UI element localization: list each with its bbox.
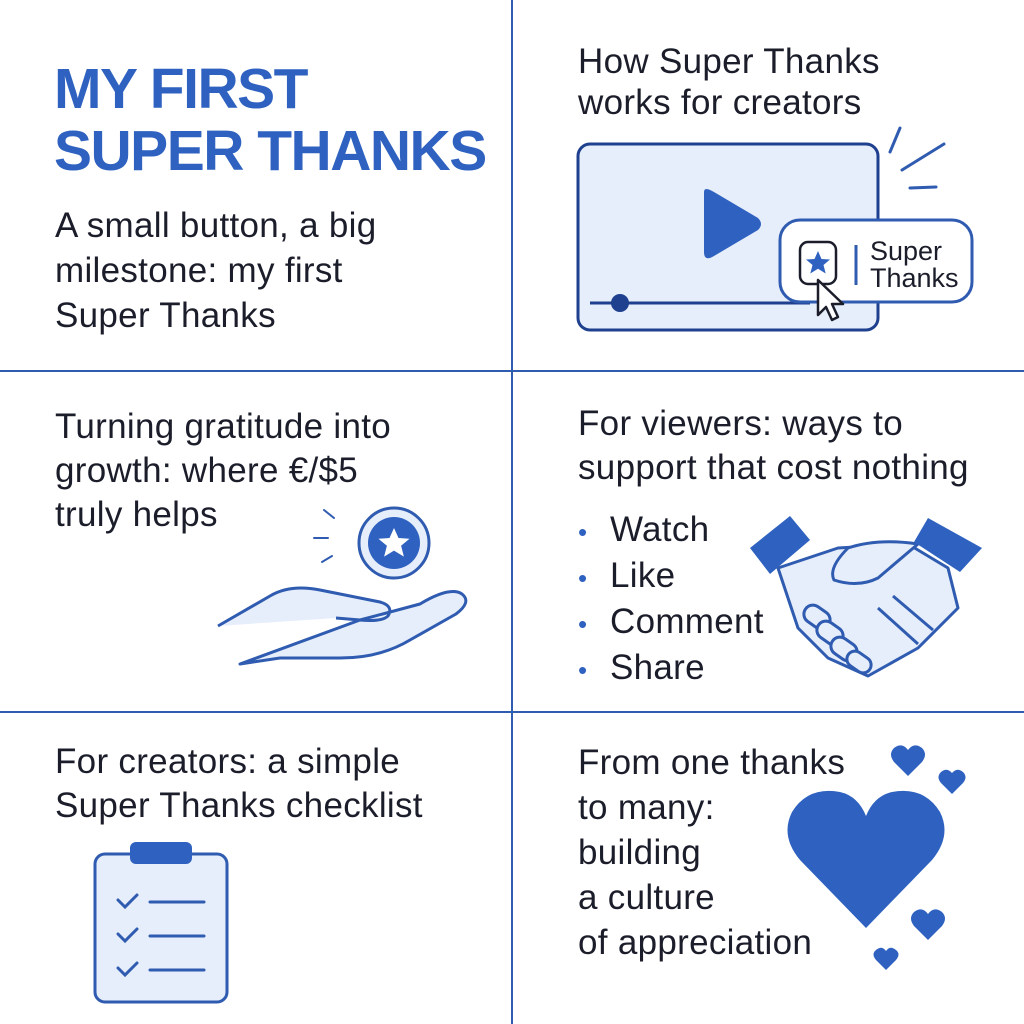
list: free support: • (578, 563, 587, 593)
heading: how it works: works for creators (578, 83, 862, 122)
list: free support: Share (610, 648, 705, 687)
title (54, 57, 486, 183)
heading: culture: of appreciation (578, 923, 812, 962)
icon: hearts (788, 745, 966, 970)
heading: how it works (578, 42, 880, 122)
heading: viewers: support that cost nothing (578, 448, 969, 487)
title: SUPER THANKS (54, 119, 486, 183)
heading: culture: to many: (578, 788, 715, 827)
icon: video player with super thanks button: Thanks (870, 263, 959, 293)
heading: gratitude: truly helps (55, 495, 218, 534)
subtitle (55, 206, 376, 335)
heading: checklist: For creators: a simple (55, 742, 400, 781)
list: free support: • (578, 609, 587, 639)
list: free support: Comment (610, 602, 764, 641)
icon: handshake (750, 516, 982, 678)
heading: viewers: For viewers: ways to (578, 404, 903, 443)
heading: culture (578, 743, 845, 962)
subtitle: A small button, a big (55, 206, 376, 245)
icon: video player with super thanks button: Super (870, 236, 942, 266)
subtitle: milestone: my first (55, 251, 343, 290)
icon: video player with super thanks button (576, 126, 974, 332)
heading: culture: From one thanks (578, 743, 845, 782)
list: free support: • (578, 655, 587, 685)
heading: gratitude (55, 407, 391, 534)
heading: checklist: Super Thanks checklist (55, 786, 423, 825)
heading: culture: a culture (578, 878, 715, 917)
list: free support: Watch (610, 510, 709, 549)
heading: gratitude: Turning gratitude into (55, 407, 391, 446)
heading: how it works: How Super Thanks (578, 42, 880, 81)
list: free support: Like (610, 556, 675, 595)
icon: clipboard checklist (94, 842, 228, 1004)
heading: viewers (578, 404, 969, 487)
list: free support (578, 510, 764, 687)
heading: gratitude: growth: where €/$5 (55, 451, 358, 490)
subtitle: Super Thanks (55, 296, 276, 335)
heading: checklist (55, 742, 423, 825)
title: MY FIRST (54, 57, 307, 121)
icon: hand with coin (217, 506, 468, 666)
heading: culture: building (578, 833, 701, 872)
list: free support: • (578, 517, 587, 547)
